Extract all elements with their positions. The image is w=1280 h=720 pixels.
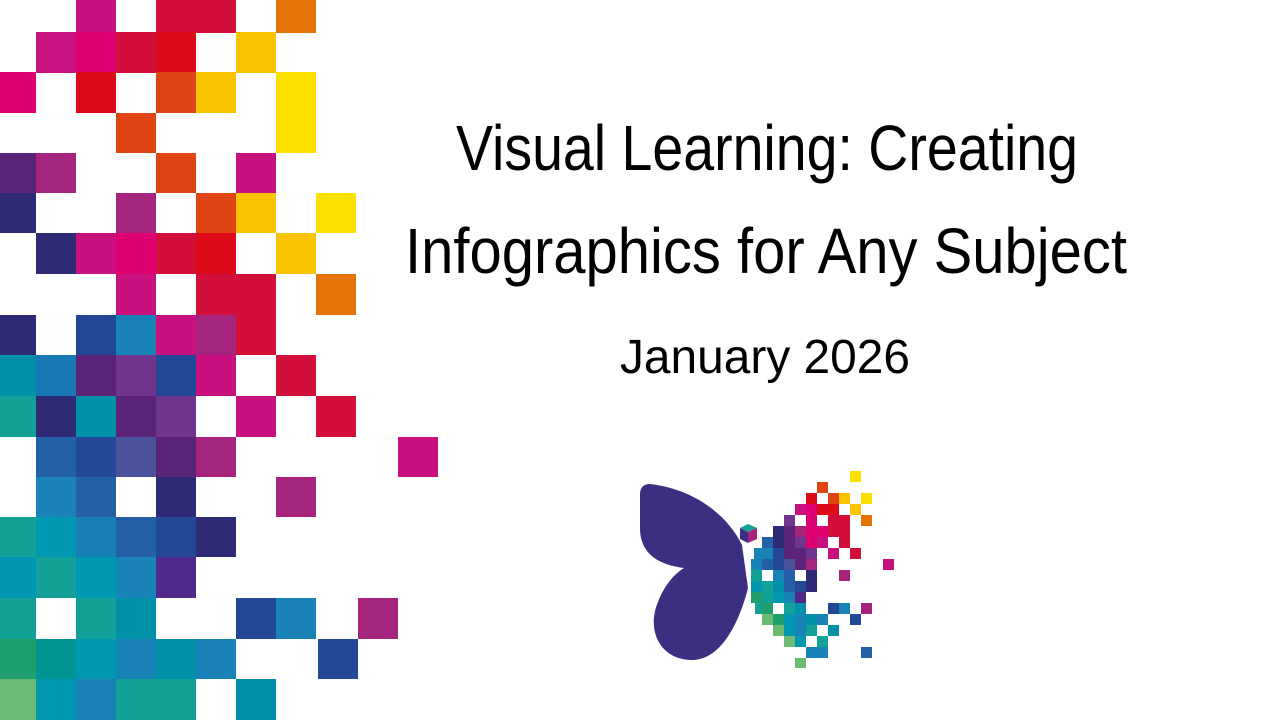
- title: Visual Learning: Creating: [456, 112, 1078, 184]
- pixel mosaic: left decorative grid: [0, 0, 438, 720]
- row0: [76, 0, 116, 33]
- logo: butterfly: [640, 471, 894, 668]
- title: [405, 112, 1127, 287]
- title: Infographics for Any Subject: [405, 215, 1127, 287]
- icon: left wing: [640, 484, 748, 660]
- date: January 2026: [620, 331, 910, 384]
- icon: pixel right wing: [751, 471, 894, 668]
- icon: cube: [740, 524, 757, 543]
